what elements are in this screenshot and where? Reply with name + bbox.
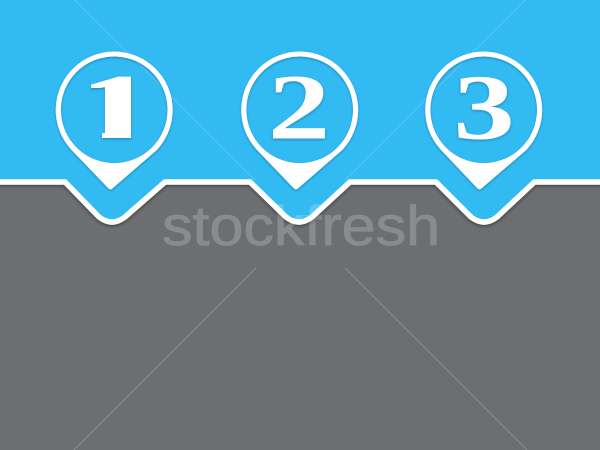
pin 2 outline — [241, 52, 358, 189]
pin 3 — [425, 52, 542, 190]
pin 3 outline — [425, 52, 542, 190]
pin 1 — [56, 52, 173, 190]
number 3: 3 — [453, 56, 515, 159]
pin 1 outline — [56, 52, 173, 190]
pin 2 — [241, 52, 358, 189]
watermark text: stockfresh — [162, 194, 440, 257]
watermark diagonal lines — [74, 0, 527, 450]
blue header band with three notches — [0, 0, 600, 222]
number 1: 1 — [69, 55, 162, 158]
number 2: 2 — [268, 56, 330, 159]
